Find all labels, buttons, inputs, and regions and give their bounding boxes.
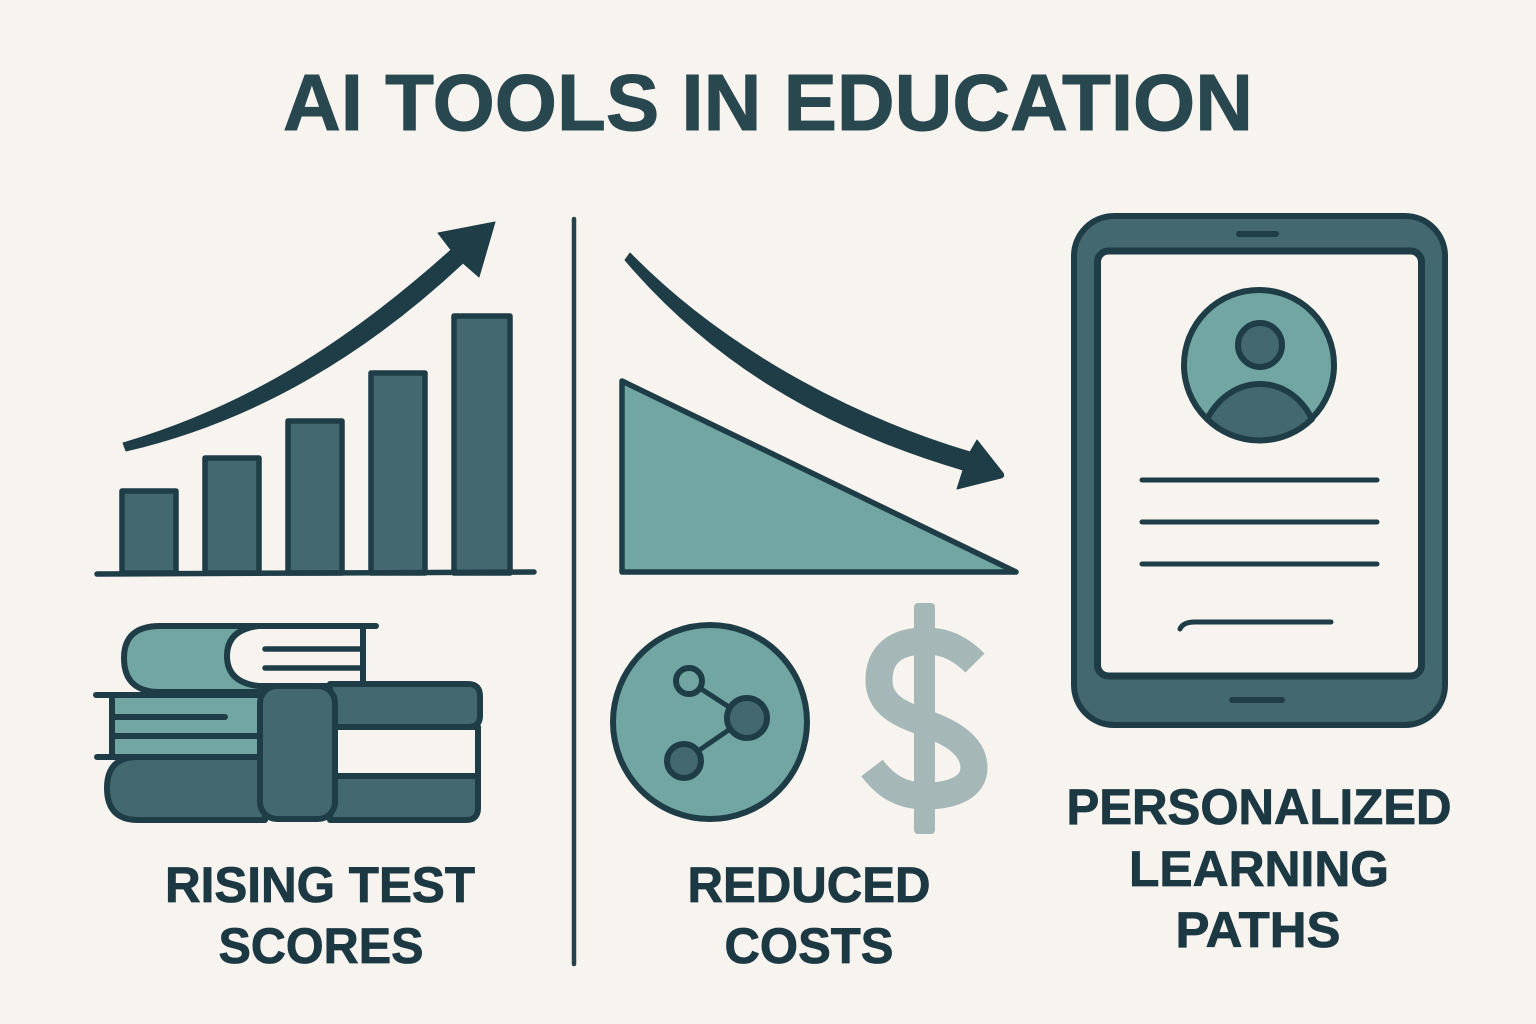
bar chart <box>97 316 534 574</box>
icon: stack of books <box>96 626 480 820</box>
label: reduced costs <box>688 857 930 974</box>
binding band <box>260 686 335 819</box>
arrow: falling trend <box>625 253 1004 489</box>
label: rising test scores: SCORES <box>218 918 424 974</box>
bottom book <box>107 757 265 820</box>
label: personalized learning paths: LEARNING <box>1129 841 1389 897</box>
arrow: rising trend <box>123 222 495 451</box>
icon: dollar sign <box>872 603 975 834</box>
panel: rising test scores <box>96 222 534 974</box>
label: personalized learning paths: PATHS <box>1176 902 1340 958</box>
label: rising test scores: RISING TEST <box>165 857 475 913</box>
label: rising test scores <box>165 857 475 974</box>
panel divider <box>572 219 576 964</box>
label: personalized learning paths: PERSONALIZED <box>1066 779 1452 835</box>
right book <box>330 727 478 777</box>
label: reduced costs: REDUCED <box>688 857 930 913</box>
text lines <box>1142 480 1377 629</box>
top book <box>124 626 363 692</box>
chart: declining area <box>622 381 1016 572</box>
icon: network circle <box>613 625 807 819</box>
icon: user avatar <box>1184 290 1334 440</box>
middle book <box>112 695 262 757</box>
title: AI TOOLS IN EDUCATION <box>283 58 1253 147</box>
panel: reduced costs <box>613 253 1016 974</box>
panel: personalized learning paths <box>1066 216 1452 958</box>
icon: tablet <box>1074 216 1445 725</box>
label: personalized learning paths <box>1066 779 1452 958</box>
label: reduced costs: COSTS <box>724 918 894 974</box>
